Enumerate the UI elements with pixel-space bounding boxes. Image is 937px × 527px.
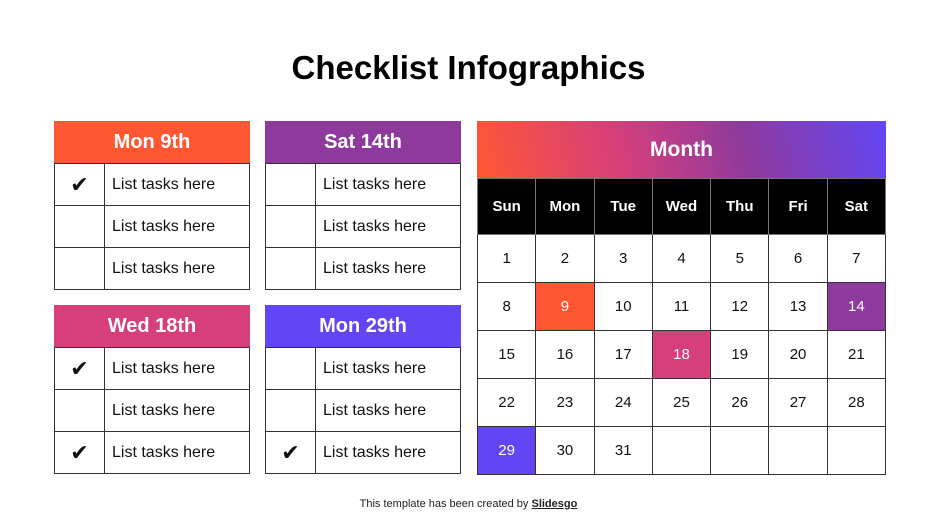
footer credit: This template has been created by Slidesgo — [360, 498, 577, 510]
panel: Mon 29th: List tasks here — [323, 402, 426, 418]
calendar grid: 2 — [561, 250, 569, 267]
panel: Wed 18th: List tasks here — [112, 360, 215, 376]
calendar grid: 23 — [557, 394, 573, 411]
calendar grid: 8 — [502, 298, 511, 315]
panel: Sat 14th: List tasks here — [323, 260, 426, 276]
panel: Sat 14th — [265, 121, 461, 290]
calendar grid: 5 — [736, 250, 744, 267]
calendar grid: Tue — [610, 198, 636, 215]
calendar grid: 7 — [852, 250, 861, 267]
calendar grid: 26 — [731, 394, 748, 411]
panel: Mon 29th: ✔ — [281, 440, 300, 464]
panel: Sat 14th: Sat 14th — [324, 130, 402, 152]
calendar grid: 3 — [619, 250, 627, 267]
calendar grid: 6 — [794, 250, 802, 267]
calendar grid: 9 — [561, 298, 569, 315]
calendar grid: 12 — [731, 298, 748, 315]
panel: Mon 9th: List tasks here — [112, 218, 215, 234]
calendar grid: 31 — [615, 442, 632, 459]
panel: Wed 18th: Wed 18th — [108, 314, 196, 336]
calendar grid: Wed — [666, 198, 697, 215]
panel: calendar — [477, 121, 886, 475]
calendar grid: 10 — [615, 298, 632, 315]
calendar header — [477, 121, 886, 178]
calendar grid: 1 — [502, 250, 511, 267]
panel: Mon 29th — [265, 305, 461, 474]
calendar grid: 17 — [615, 346, 632, 363]
panel: Wed 18th: ✔ — [70, 356, 89, 380]
panel: Mon 9th: ✔ — [70, 172, 89, 196]
panel: Wed 18th: ✔ — [70, 440, 89, 464]
calendar grid: Fri — [788, 198, 808, 215]
panel: Wed 18th: List tasks here — [112, 444, 215, 460]
calendar grid: 4 — [677, 250, 686, 267]
calendar grid: Sat — [845, 198, 868, 215]
calendar grid: 21 — [848, 346, 865, 363]
panel: Mon 9th — [54, 121, 250, 290]
calendar grid: Thu — [726, 198, 754, 215]
calendar grid: 24 — [615, 394, 632, 411]
panel: Mon 9th: Mon 9th — [114, 130, 190, 152]
panel: Mon 9th: List tasks here — [112, 176, 215, 192]
calendar grid: 19 — [731, 346, 748, 363]
calendar grid: Sun — [492, 198, 521, 215]
panel: Mon 29th: List tasks here — [323, 444, 426, 460]
calendar grid: 16 — [557, 346, 573, 363]
panel: Mon 29th: List tasks here — [323, 360, 426, 376]
calendar grid: 30 — [557, 442, 573, 459]
calendar grid: 11 — [674, 298, 689, 315]
calendar grid: 20 — [790, 346, 806, 363]
calendar header: Month — [650, 138, 713, 160]
panel: Sat 14th: List tasks here — [323, 176, 426, 192]
calendar grid: 22 — [498, 394, 515, 411]
calendar grid — [477, 178, 886, 475]
calendar grid: 18 — [673, 346, 690, 363]
panel: Wed 18th: List tasks here — [112, 402, 215, 418]
calendar grid: 14 — [848, 298, 865, 315]
calendar grid: 13 — [790, 298, 806, 315]
calendar grid: 28 — [848, 394, 865, 411]
panel: Sat 14th: List tasks here — [323, 218, 426, 234]
panel: Mon 29th: Mon 29th — [319, 314, 407, 336]
calendar grid: 25 — [673, 394, 690, 411]
calendar grid: 29 — [498, 442, 515, 459]
calendar grid: 27 — [790, 394, 806, 411]
calendar grid: 15 — [498, 346, 515, 363]
panel: Wed 18th — [54, 305, 250, 474]
title: Checklist Infographics — [292, 49, 645, 86]
calendar grid: Mon — [550, 198, 580, 215]
panel: Mon 9th: List tasks here — [112, 260, 215, 276]
